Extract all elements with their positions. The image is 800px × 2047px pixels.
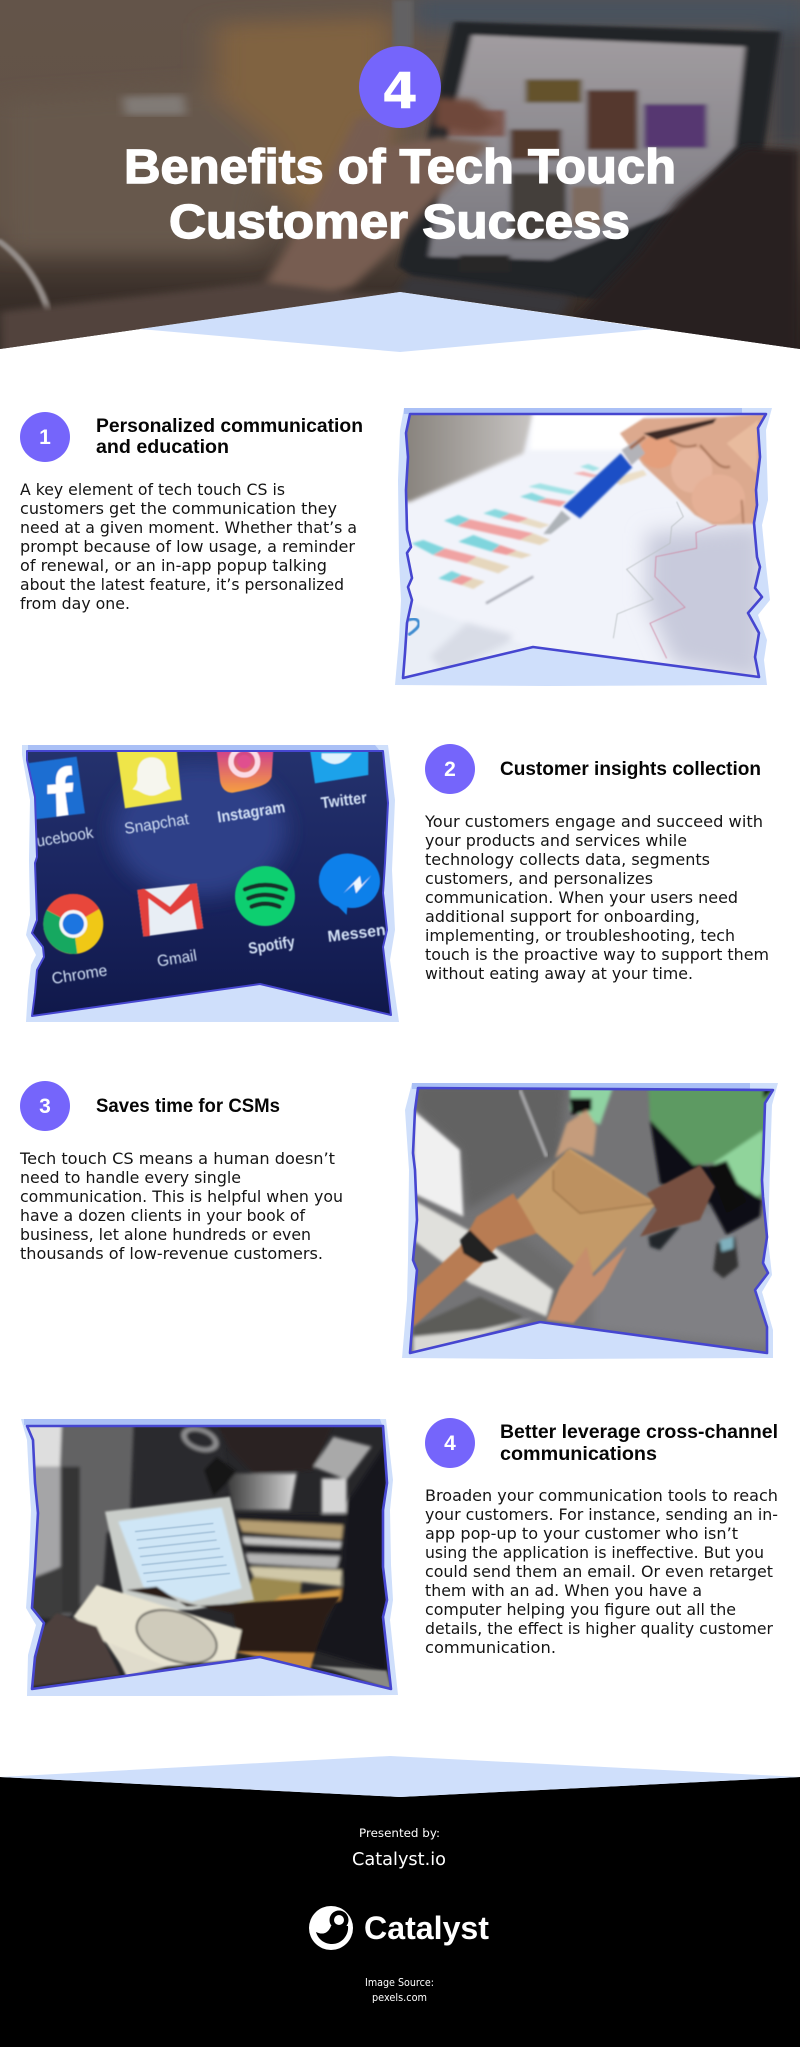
body text 1: of renewal, or an in-app popup talking — [20, 557, 327, 575]
body text 2: customers, and personalizes — [425, 870, 653, 888]
footer light-blue chevron — [0, 1756, 800, 1797]
body text 2: implementing, or troubleshooting, tech — [425, 927, 735, 945]
body text 1 — [20, 481, 357, 613]
logo: Catalyst — [309, 1906, 489, 1950]
image source credit: pexels.com — [372, 1992, 427, 2004]
photo frame 4: person reading with tablet — [0, 1400, 420, 1700]
heading 2: Customer insights collection — [500, 759, 761, 780]
hero light-blue chevron — [140, 292, 655, 352]
body text 2 — [424, 813, 769, 983]
photo frame 2: app icons — [22, 745, 399, 1022]
photo frame 2: app icons: Messen — [327, 922, 387, 946]
body text 4 — [425, 1487, 778, 1657]
body text 3: business, let alone hundreds or even — [20, 1226, 311, 1244]
body text 2: additional support for onboarding, — [425, 908, 700, 926]
panel: benefit 2 — [0, 730, 769, 1030]
body text 4: app pop-up to your customer who isn’t — [425, 1525, 738, 1543]
badge: 4: 4 — [382, 62, 418, 120]
badge: 4 — [359, 46, 441, 128]
hero background photo — [0, 0, 800, 360]
photo frame 2: app icons: Gmail — [156, 948, 198, 971]
logo: Catalyst: Catalyst — [364, 1910, 489, 1946]
heading 4: communications — [500, 1444, 657, 1465]
photo frame 2: app icons: Snapchat — [123, 811, 191, 838]
image source credit: Image Source: — [365, 1977, 434, 1989]
number badge 1: 1 — [39, 426, 51, 449]
body text 2: touch is the proactive way to support them — [425, 946, 769, 964]
image source credit — [365, 1977, 434, 2004]
body text 1: A key element of tech touch CS is — [20, 481, 285, 499]
body text 4: computer helping you figure out all the — [425, 1601, 736, 1619]
title: Benefits of Tech Touch — [124, 141, 676, 194]
body text 2: Your customers engage and succeed with — [424, 813, 763, 831]
number badge 4: 4 — [444, 1432, 456, 1455]
body text 4: Broaden your communication tools to reach — [425, 1487, 778, 1505]
photo frame 2: app icons: ucebook — [35, 825, 96, 851]
body text 2: without eating away at your time. — [425, 965, 693, 983]
body text 3: have a dozen clients in your book of — [20, 1207, 306, 1225]
body text 4: your customers. For instance, sending an in- — [425, 1506, 778, 1524]
body text 1: customers get the communication they — [20, 500, 337, 518]
number badge 2 — [425, 744, 475, 794]
heading 1 — [96, 416, 363, 458]
body text 1: about the latest feature, it’s personalized — [20, 576, 344, 594]
body text 2: your products and services while — [425, 832, 687, 850]
body text 3: thousands of low-revenue customers. — [20, 1245, 323, 1263]
body text 1: prompt because of low usage, a reminder — [20, 538, 356, 556]
number badge 2: 2 — [444, 758, 456, 781]
photo frame 2: app icons: Twitter — [320, 790, 368, 812]
panel: benefit 4 — [0, 1400, 778, 1700]
photo frame 2: app icons: Instagram — [216, 799, 286, 827]
photo frame 1: charts and pen — [395, 408, 772, 686]
number badge 4 — [425, 1418, 475, 1468]
body text 2: communication. When your users need — [425, 889, 738, 907]
heading 4: Better leverage cross-channel — [500, 1422, 778, 1443]
number badge 1 — [20, 412, 70, 462]
panel: benefit 3 — [19, 1070, 800, 1370]
photo frame 2: app icons: Chrome — [51, 962, 109, 988]
company name: Catalyst.io — [352, 1849, 446, 1870]
body text 3 — [19, 1150, 343, 1263]
heading 4 — [500, 1422, 778, 1465]
number badge 3: 3 — [39, 1095, 51, 1118]
photo frame 2: app icons: Spotify — [247, 934, 296, 958]
body text 4: them with an ad. When you have a — [425, 1582, 702, 1600]
photo frame 3: envelope handover — [380, 1070, 800, 1370]
body text 4: using the application is ineffective. But you — [425, 1544, 764, 1562]
body text 3: communication. This is helpful when you — [20, 1188, 343, 1206]
body text 1: need at a given moment. Whether that’s a — [20, 519, 357, 537]
heading 3: Saves time for CSMs — [96, 1096, 280, 1117]
body text 4: communication. — [425, 1639, 556, 1657]
panel: hero header — [0, 0, 800, 360]
panel: footer — [0, 1756, 800, 2047]
body text 1: from day one. — [20, 595, 130, 613]
heading 1: and education — [96, 437, 229, 458]
body text 2: technology collects data, segments — [425, 851, 710, 869]
body text 3: need to handle every single — [20, 1169, 241, 1187]
panel: benefit 1 — [20, 408, 772, 686]
title — [124, 141, 676, 249]
heading 1: Personalized communication — [96, 416, 363, 437]
body text 4: details, the effect is higher quality customer — [425, 1620, 774, 1638]
footer black background — [0, 1777, 800, 2047]
body text 3: Tech touch CS means a human doesn’t — [19, 1150, 335, 1168]
presented by label: Presented by: — [359, 1826, 440, 1840]
title: Customer Success — [169, 196, 630, 249]
body text 4: could send them an email. Or even retarget — [425, 1563, 773, 1581]
number badge 3 — [20, 1081, 70, 1131]
